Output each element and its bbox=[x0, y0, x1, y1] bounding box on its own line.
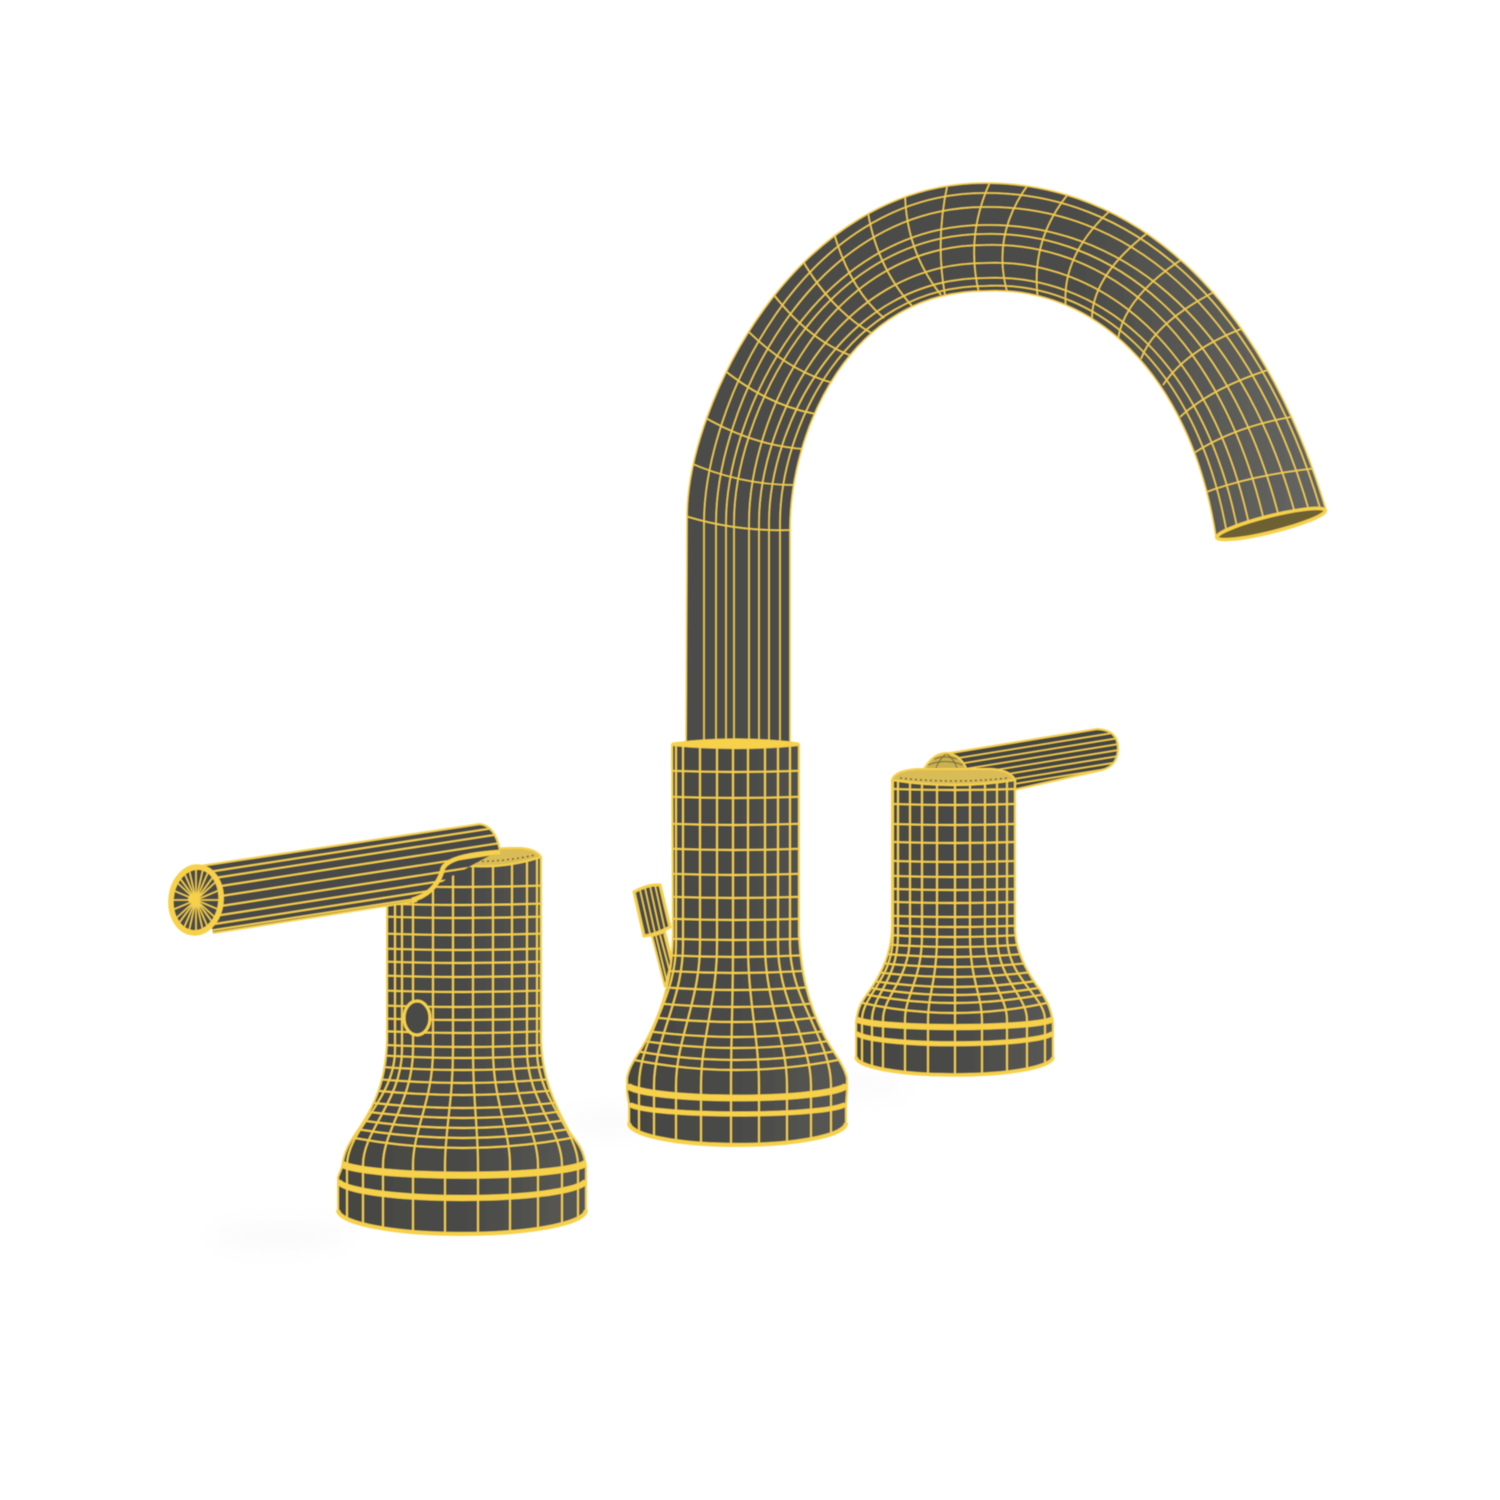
faucet artwork bbox=[168, 180, 1327, 1240]
right top plate bbox=[892, 769, 1015, 785]
lift rod and knob bbox=[634, 885, 672, 987]
left set-screw hole bbox=[404, 1001, 430, 1035]
center bottom edge bbox=[629, 1123, 846, 1145]
spout lengthwise wires bbox=[704, 193, 1321, 750]
left body mesh bbox=[338, 858, 586, 1232]
left base body bbox=[330, 848, 595, 1240]
right body mesh bbox=[856, 780, 1053, 1074]
collar rim bbox=[672, 740, 799, 747]
lever cut-out crescent bbox=[412, 852, 500, 900]
faucet wireframe illustration bbox=[168, 182, 1328, 1237]
spout cross wires bbox=[685, 180, 1318, 530]
center body mesh bbox=[620, 745, 852, 1150]
center base body bbox=[620, 740, 852, 1150]
spout: arched tube with wire mesh bbox=[685, 180, 1327, 750]
left bottom edge bbox=[338, 1210, 586, 1234]
lever lengthwise wires bbox=[212, 828, 498, 932]
right handle dome bbox=[923, 753, 968, 773]
soft floor shadows bbox=[210, 1079, 910, 1244]
right bottom edge bbox=[856, 1057, 1053, 1075]
lever end cap with spokes bbox=[168, 865, 224, 935]
left handle lever bbox=[168, 824, 510, 935]
right base body bbox=[850, 769, 1060, 1080]
spout outlet opening bbox=[1215, 503, 1327, 545]
right handle lever bbox=[923, 729, 1125, 800]
left top surface bbox=[443, 848, 541, 866]
